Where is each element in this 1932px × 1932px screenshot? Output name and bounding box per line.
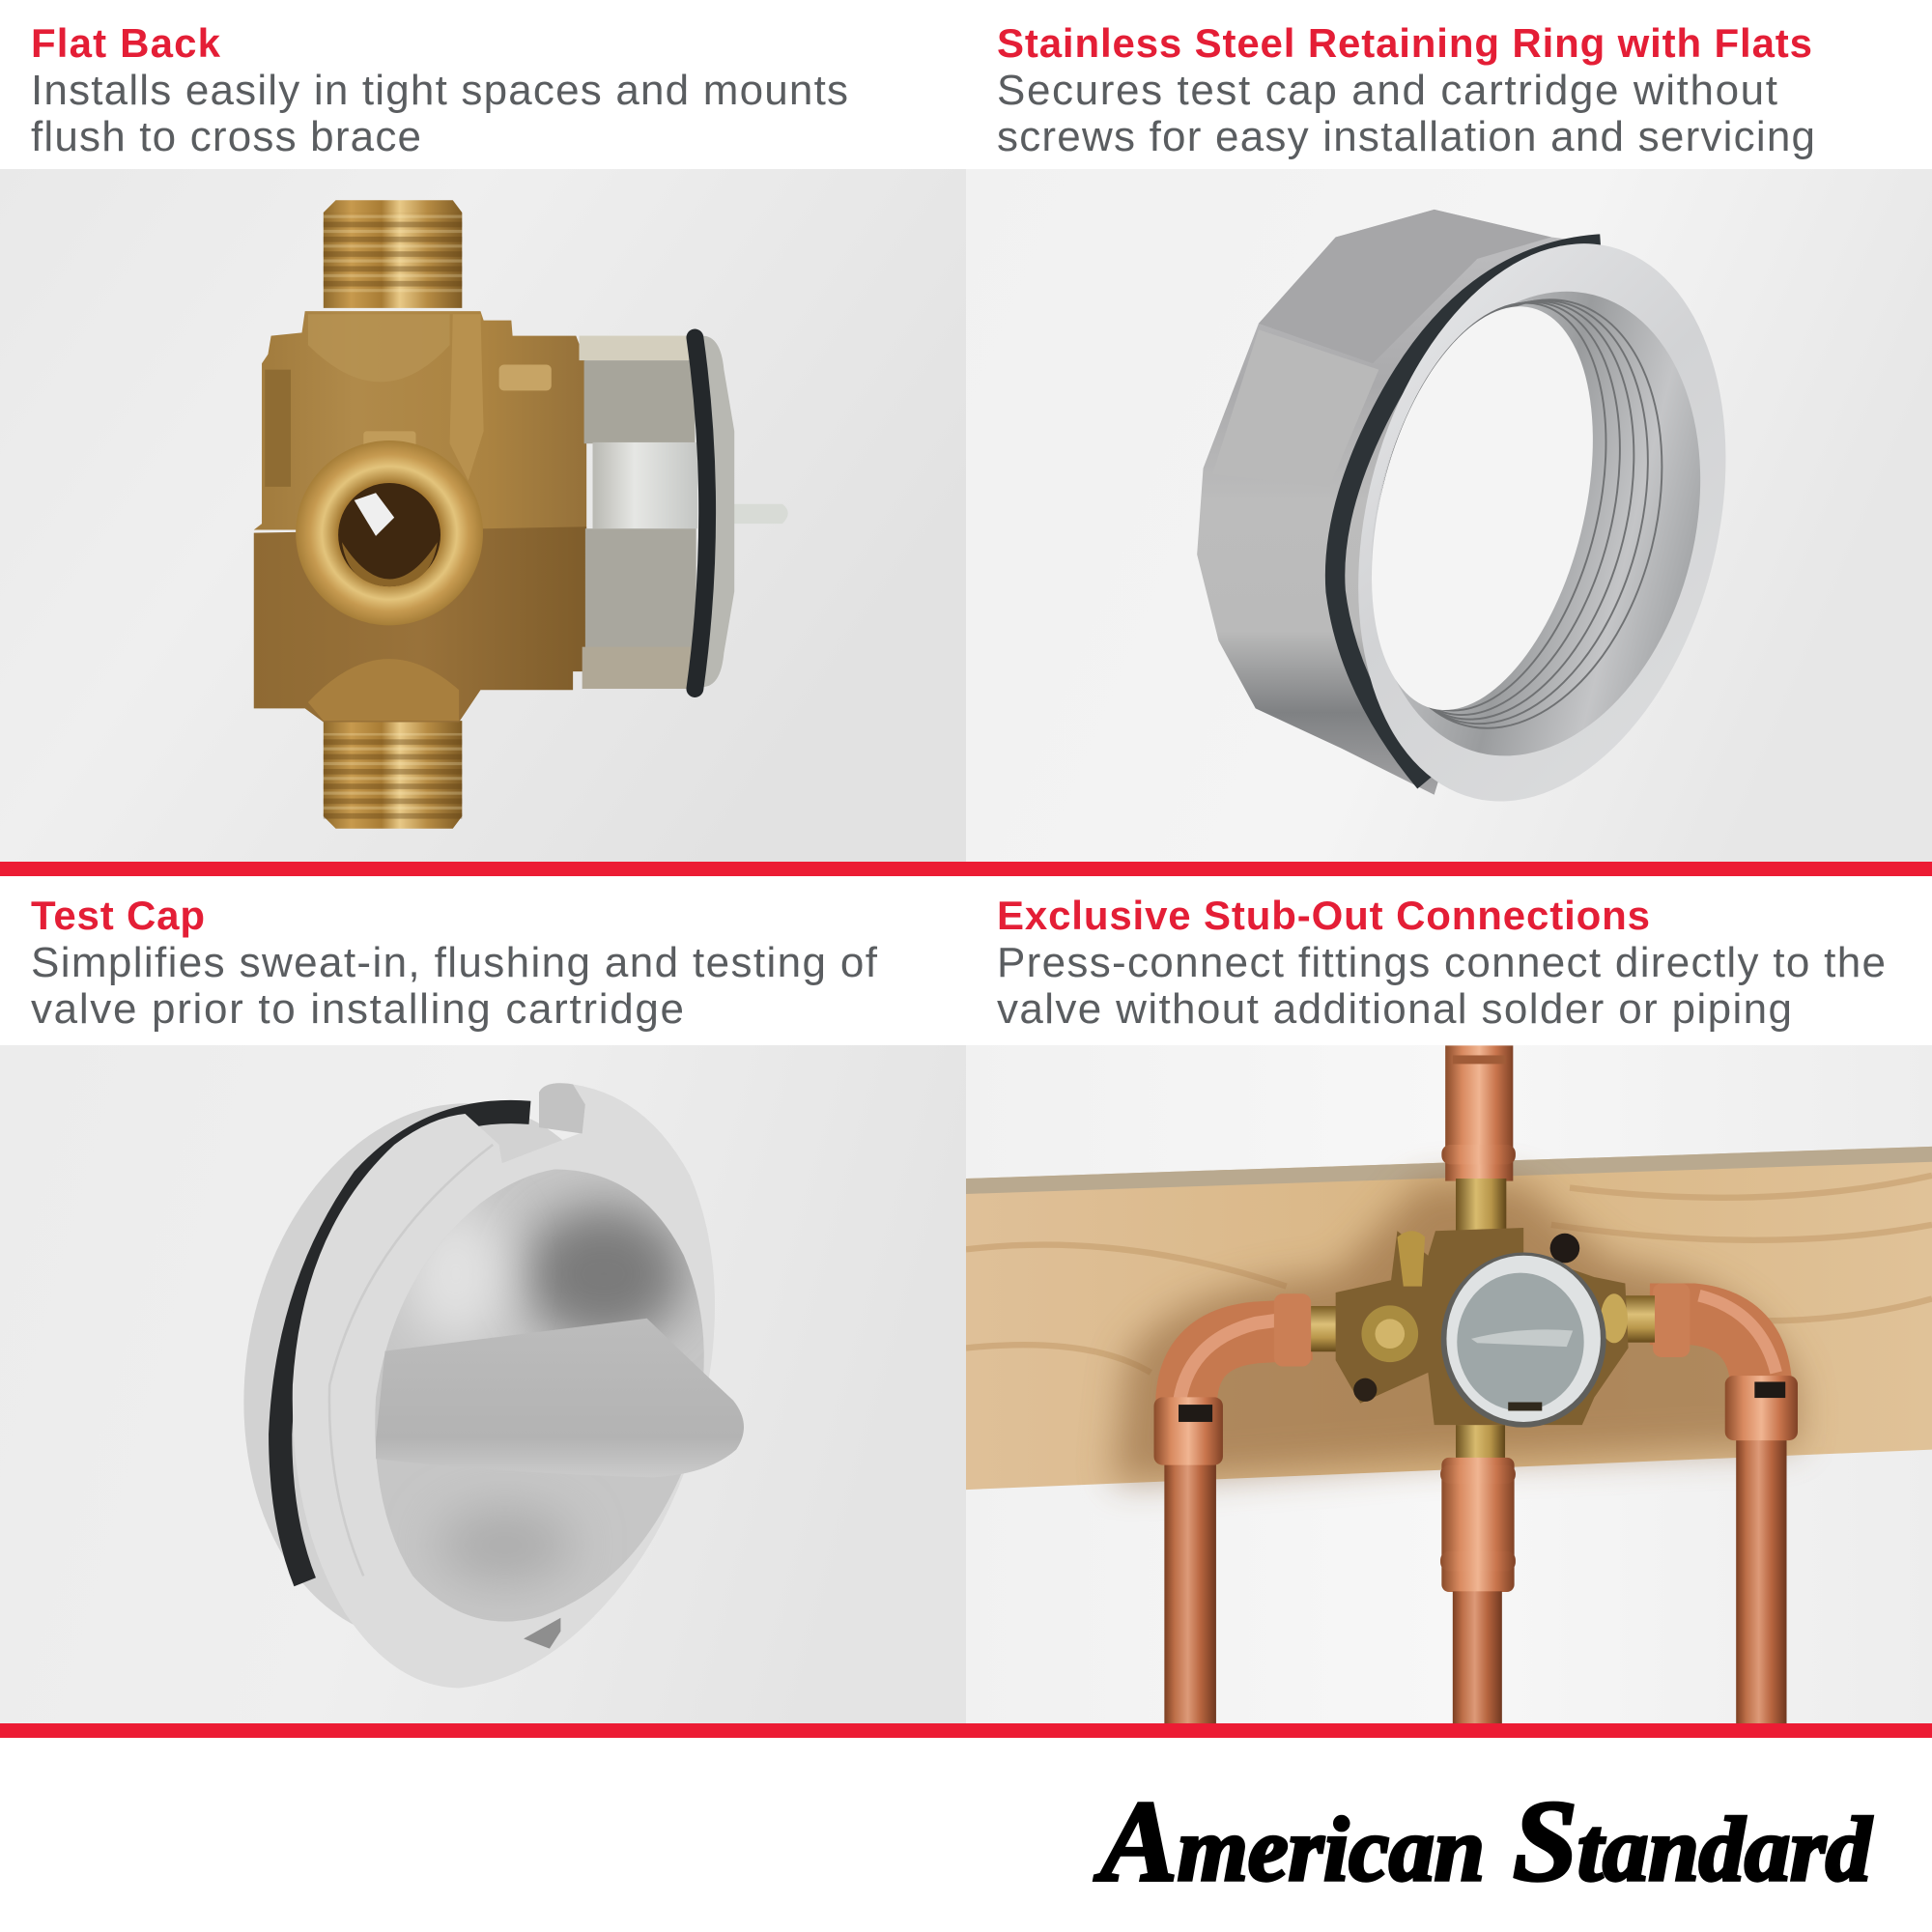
image: installed valve with copper pipes bbox=[966, 1045, 1932, 1723]
image: grey test cap bbox=[202, 1071, 744, 1688]
heading: stub-out connections: Exclusive Stub-Out Connections bbox=[997, 893, 1650, 938]
panel: retaining ring bbox=[966, 20, 1932, 862]
sub-element: cap plate and stem bbox=[702, 336, 788, 687]
text: retaining ring description bbox=[997, 67, 1815, 160]
photo background: retaining ring bbox=[966, 169, 1932, 862]
sub-element: test cap in valve bbox=[1441, 1253, 1606, 1428]
divider: bottom red bar bbox=[0, 1723, 1932, 1738]
text: stub-out description: valve without additional solder or piping bbox=[997, 985, 1792, 1033]
text: flat back description bbox=[31, 67, 848, 160]
text: retaining ring description: Secures test cap and cartridge without bbox=[997, 67, 1777, 114]
text: retaining ring description: screws for easy installation and servicing bbox=[997, 113, 1815, 160]
photo background: flat back bbox=[0, 169, 966, 862]
sub-element: right elbow and pipe bbox=[1619, 1283, 1798, 1723]
text: test cap description: Simplifies sweat-in, flushing and testing of bbox=[31, 939, 878, 986]
text: stub-out description bbox=[997, 939, 1886, 1033]
sub-element: recess bbox=[375, 1169, 704, 1621]
panel: stub-out connections bbox=[966, 893, 1932, 1723]
heading: retaining ring: Stainless Steel Retaining Ring with Flats bbox=[997, 20, 1812, 66]
text: stub-out description: Press-connect fittings connect directly to the bbox=[997, 939, 1886, 986]
panel: flat back bbox=[0, 20, 966, 862]
logo: American Standard bbox=[1094, 1776, 1873, 1905]
text: test cap description bbox=[31, 939, 878, 1033]
sub-element: o-ring bbox=[695, 337, 707, 689]
text: flat back description: flush to cross brace bbox=[31, 113, 421, 160]
image: stainless ring bbox=[1197, 205, 1781, 840]
sub-element: center pipes bbox=[1440, 1045, 1516, 1723]
sub-element: threaded inner wall bbox=[1324, 256, 1747, 791]
image: brass valve bbox=[254, 200, 788, 829]
photo background: stub-out bbox=[966, 1045, 1932, 1723]
sub-element: valve body bbox=[1336, 1228, 1629, 1425]
sub-element: shadow on brace bbox=[1114, 1181, 1798, 1484]
sub-element: ring face bbox=[1303, 205, 1781, 840]
heading: flat back: Flat Back bbox=[31, 20, 221, 66]
panel: test cap bbox=[0, 893, 966, 1723]
sub-element: flange bbox=[293, 1083, 715, 1688]
text: flat back description: Installs easily in tight spaces and mounts bbox=[31, 67, 848, 114]
text: test cap description: valve prior to installing cartridge bbox=[31, 985, 684, 1033]
logo: American Standard: Standard bbox=[1513, 1776, 1873, 1905]
sub-element: wood cross brace bbox=[966, 1147, 1932, 1490]
sub-element: inlet port bbox=[296, 440, 483, 625]
sub-element: handle bbox=[376, 1319, 744, 1477]
photo background: test cap bbox=[0, 1045, 966, 1723]
heading: test cap: Test Cap bbox=[31, 893, 205, 938]
logo: American Standard: American bbox=[1094, 1776, 1485, 1905]
divider: top red bar bbox=[0, 862, 1932, 876]
sub-element: retaining nut bbox=[579, 336, 697, 689]
sub-element: o-ring bbox=[1335, 244, 1601, 782]
sub-element: opening bbox=[1334, 283, 1631, 733]
sub-element: o-ring bbox=[280, 1112, 529, 1582]
sub-element: left elbow and pipe bbox=[1154, 1293, 1348, 1723]
